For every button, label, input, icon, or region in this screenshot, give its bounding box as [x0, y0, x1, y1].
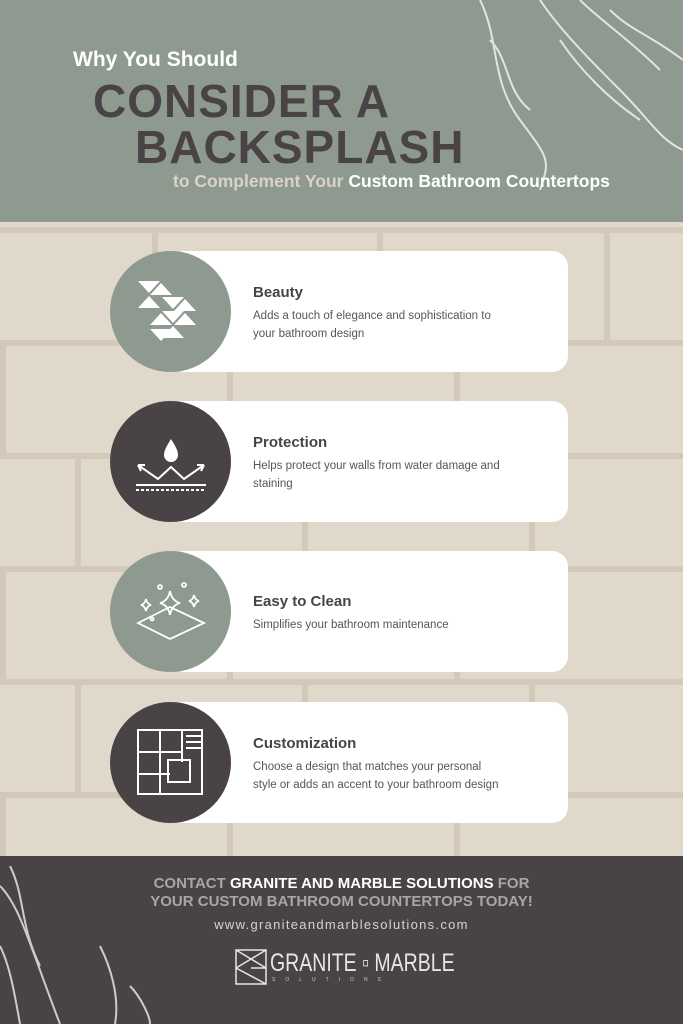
header band: [0, 0, 683, 222]
icon: triangles: [110, 251, 231, 372]
text: beauty: Adds a touch of elegance and sophistication to your bathroom design: [253, 310, 491, 340]
text: beauty: [253, 284, 491, 340]
tile background: [0, 227, 683, 856]
logo: [235, 949, 455, 985]
panel: beauty: [110, 251, 568, 372]
icon: water drop: [110, 401, 231, 522]
title: CONSIDER A: [93, 75, 390, 127]
call to action: [150, 875, 533, 910]
logo: SOLUTIONS: [272, 977, 391, 983]
text: customization: Choose a design that matches your personal style or adds an accent to your bathroom design: [253, 761, 498, 791]
title: Why You Should: [73, 48, 238, 71]
text: protection: Helps protect your walls from water damage and staining: [253, 460, 500, 490]
title: BACKSPLASH: [135, 121, 464, 173]
call to action: CONTACT GRANITE AND MARBLE SOLUTIONS FOR: [154, 875, 529, 892]
marble texture: [479, 0, 683, 190]
website: www.graniteandmarblesolutions.com: [214, 917, 469, 932]
title: [73, 48, 610, 191]
text: easy to clean: [253, 593, 449, 631]
text: easy to clean: Simplifies your bathroom maintenance: [253, 619, 449, 631]
title: to Complement Your Custom Bathroom Countertops: [173, 171, 610, 191]
panel: easy to clean: [110, 551, 568, 672]
text: protection: [253, 434, 500, 490]
text: protection: Protection: [253, 434, 327, 451]
text: customization: [253, 735, 498, 791]
panel: protection: [110, 401, 568, 522]
panel: customization: [110, 702, 568, 823]
marble texture: [0, 866, 151, 1024]
icon: sparkles: [110, 551, 231, 672]
call to action: YOUR CUSTOM BATHROOM COUNTERTOPS TODAY!: [150, 893, 533, 910]
logo: GRANITE ▫ MARBLE: [270, 949, 455, 977]
text: easy to clean: Easy to Clean: [253, 593, 351, 610]
footer band: [0, 856, 683, 1024]
text: customization: Customization: [253, 735, 356, 752]
text: beauty: Beauty: [253, 284, 303, 301]
icon: tile layout: [110, 702, 231, 823]
